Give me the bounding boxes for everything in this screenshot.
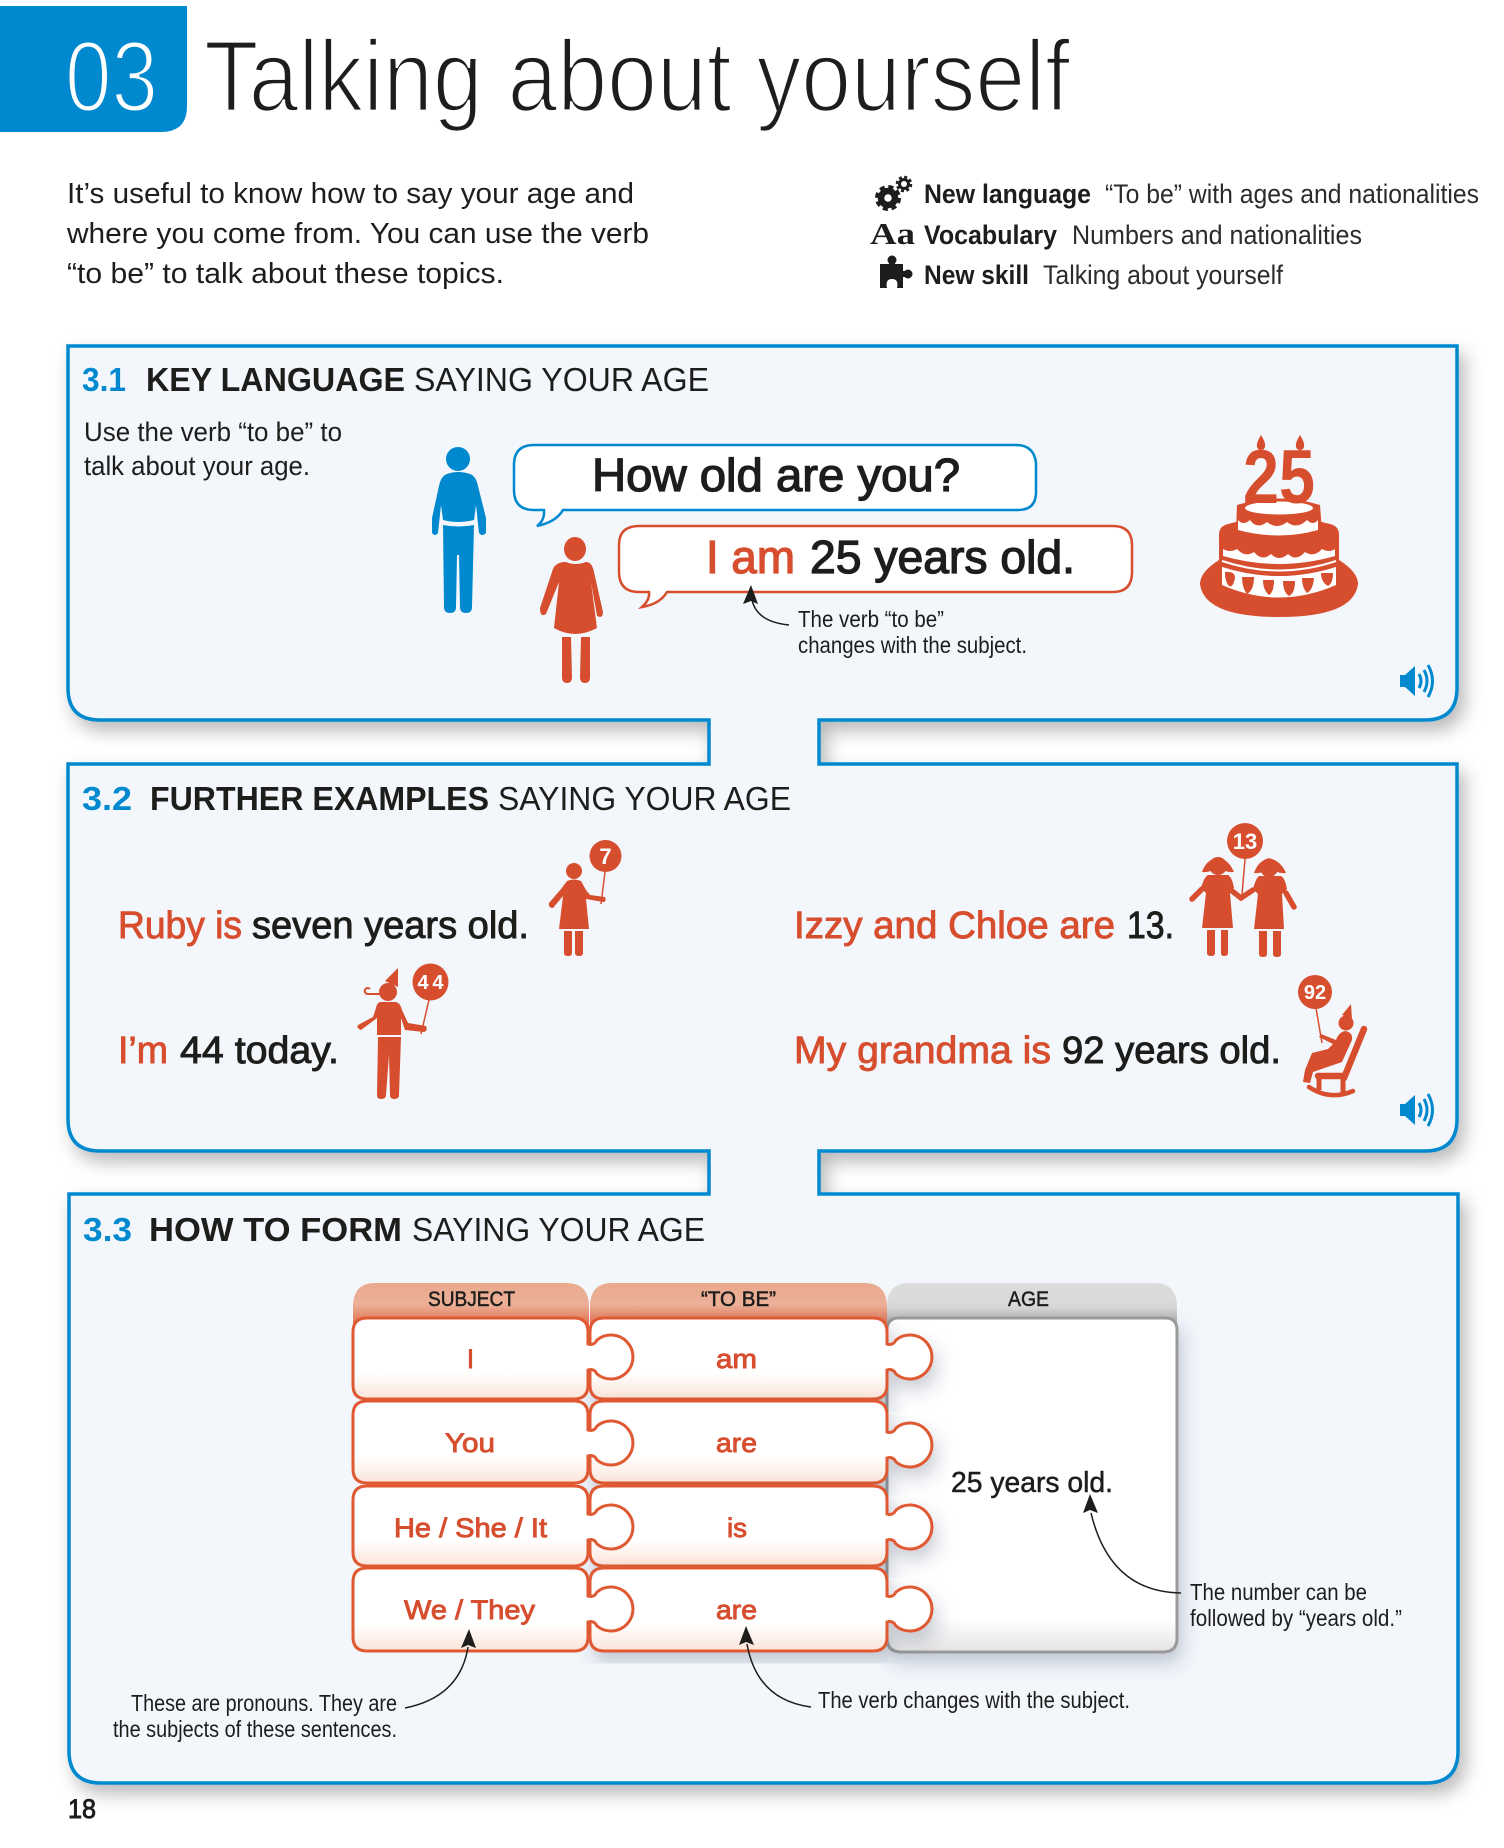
heading 3.1 [82, 361, 709, 398]
icon: birthday cake: 25 [1243, 435, 1315, 520]
arrow: to the verb [743, 585, 789, 625]
sentence: I'm 44: I’m [118, 1030, 168, 1072]
sentence: I'm 44 [118, 1030, 339, 1072]
objective: new skill [924, 260, 1283, 290]
icon: man with hat and balloon: 44 [418, 972, 444, 994]
icon: blue man [432, 447, 486, 613]
heading 3.2: 3.2 [82, 780, 132, 817]
heading 3.3 [83, 1211, 705, 1248]
sentence: Ruby: Ruby is [118, 905, 242, 947]
heading 3.2 [82, 780, 791, 817]
annotation: pronouns: These are pronouns. They are [131, 1690, 397, 1716]
heading 3.3: HOW TO FORM [149, 1211, 402, 1248]
intro text: It’s useful to know how to say your age and [67, 178, 634, 210]
column: subject [353, 1283, 633, 1651]
objective: new language: New language [924, 179, 1091, 209]
text: use the verb [84, 417, 342, 481]
objective: vocabulary: Numbers and nationalities [1072, 220, 1362, 250]
chapter number badge [0, 6, 187, 133]
heading 3.2: FURTHER EXAMPLES [150, 780, 489, 817]
learning objectives [870, 177, 1479, 290]
objective: new language: “To be” with ages and nationalities [1105, 179, 1479, 209]
arrow: to pronouns [405, 1629, 476, 1708]
annotation: years old: followed by “years old.” [1190, 1605, 1402, 1631]
objective: vocabulary: Vocabulary [924, 220, 1057, 250]
intro text [66, 178, 649, 290]
icon: birthday cake [1200, 435, 1358, 617]
sentence: grandma: My grandma is [794, 1030, 1051, 1072]
arrow: to verb [739, 1626, 811, 1707]
sentence: Izzy and Chloe: 13. [1127, 905, 1174, 947]
table headers: “TO BE” [701, 1288, 776, 1311]
column: to be [590, 1283, 932, 1651]
table cell text: He / She / It [394, 1513, 548, 1543]
chapter number badge: 03 [65, 21, 158, 133]
annotation: pronouns: the subjects of these sentences. [113, 1716, 397, 1742]
sentence: I'm 44: 44 today. [180, 1030, 339, 1072]
text: use the verb: Use the verb “to be” to [84, 417, 342, 447]
icon: audio [1400, 665, 1432, 697]
icon: Ruby with balloon [549, 840, 622, 956]
table cell text: You [445, 1428, 495, 1458]
panel frames and connectors [68, 346, 1458, 1783]
heading 3.3: SAYING YOUR AGE [412, 1211, 705, 1248]
panel: 3.1 key language [68, 344, 1458, 721]
objective: new skill: Talking about yourself [1043, 260, 1283, 290]
sentence: grandma [794, 1030, 1281, 1072]
table cell text: am [716, 1344, 757, 1374]
table cell text: We / They [404, 1595, 536, 1625]
intro text: where you come from. You can use the verb [66, 218, 649, 250]
icon: grandma in rocking chair: 92 [1304, 982, 1326, 1004]
arrow: to number [1083, 1494, 1181, 1593]
sentence: Ruby [118, 905, 529, 947]
annotation: years old: The number can be [1190, 1579, 1367, 1605]
page number: 18 [68, 1794, 96, 1824]
icon: audio [1400, 1094, 1432, 1126]
heading 3.1: SAYING YOUR AGE [414, 361, 709, 398]
table headers: SUBJECT [428, 1288, 515, 1311]
intro text: “to be” to talk about these topics. [67, 258, 504, 290]
annotation: verb changes: The verb changes with the subject. [818, 1687, 1130, 1713]
icon: red woman [540, 537, 603, 683]
title: Talking about yourself [204, 21, 1071, 133]
table cell text [394, 1344, 757, 1625]
objective: vocabulary [924, 220, 1362, 250]
table headers [428, 1288, 776, 1311]
speech bubble: answer [619, 526, 1132, 607]
annotation: verb changes: changes with the subject. [798, 632, 1027, 658]
text: use the verb: talk about your age. [84, 451, 310, 481]
table cell text: is [727, 1513, 747, 1543]
column: age: AGE [1008, 1288, 1049, 1311]
heading 3.1: KEY LANGUAGE [146, 361, 405, 398]
icon: gears [877, 177, 911, 209]
icon: twins with balloon: 13 [1233, 829, 1257, 854]
sentence: Izzy and Chloe: Izzy and Chloe are [794, 905, 1115, 947]
speech bubble: question [514, 445, 1036, 526]
heading 3.2: SAYING YOUR AGE [498, 780, 791, 817]
speech bubble: question: How old are you? [592, 449, 960, 501]
icon: man with hat and balloon [357, 964, 448, 1099]
icon: puzzle piece [880, 256, 912, 288]
table cell text: are [716, 1428, 757, 1458]
annotation: verb changes: The verb “to be” [798, 606, 944, 632]
table cell text: I [467, 1344, 474, 1374]
heading 3.3: 3.3 [83, 1211, 132, 1248]
panel: 3.2 further examples [68, 763, 1458, 1152]
objective: new skill: New skill [924, 260, 1029, 290]
sentence: grandma: 92 years old. [1062, 1030, 1281, 1072]
table cell text: are [716, 1595, 757, 1625]
icon: Ruby with balloon: 7 [599, 844, 612, 869]
sentence: Ruby: seven years old. [252, 905, 529, 947]
objective: new language [924, 179, 1479, 209]
annotation: years old [1190, 1579, 1402, 1631]
column: age: 25 years old. [951, 1467, 1113, 1499]
speech bubble: answer: 25 years old. [810, 531, 1075, 583]
icon: Aa: Aa [870, 216, 916, 251]
speech bubble: answer: I am [706, 531, 795, 583]
annotation: pronouns [113, 1690, 397, 1742]
icon: grandma in rocking chair [1298, 975, 1364, 1095]
icon: twins with balloon [1192, 823, 1294, 957]
puzzle table [353, 1283, 1177, 1652]
column: age [887, 1283, 1177, 1652]
annotation: verb changes [798, 606, 1027, 658]
heading 3.1: 3.1 [82, 361, 126, 398]
panel: 3.3 how to form [68, 1193, 1459, 1785]
